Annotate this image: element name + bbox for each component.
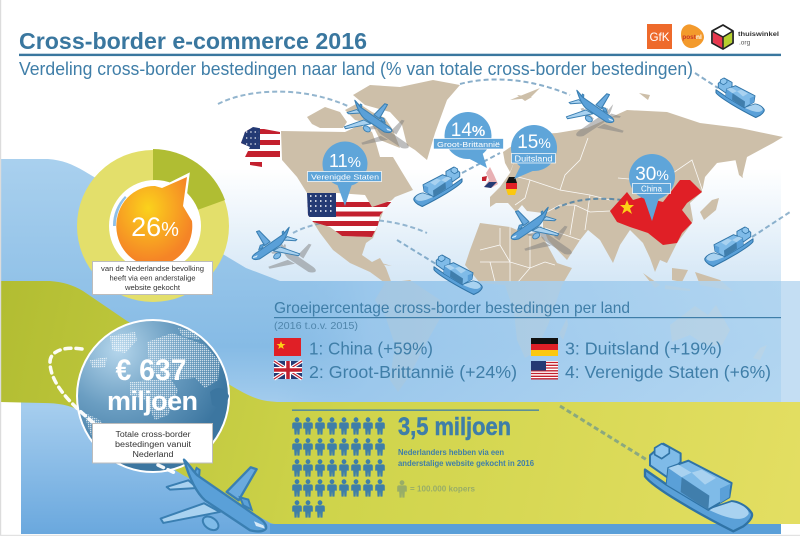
growth subheading: (2016 t.o.v. 2015) xyxy=(274,321,358,332)
callout: Groot-Brittannië 14% xyxy=(434,112,504,168)
logo: PostNL: postnl xyxy=(682,34,702,41)
Eurasia xyxy=(490,110,783,272)
text: buyers description: Nederlanders hebben via een xyxy=(398,447,504,457)
North America xyxy=(281,125,413,284)
flag: China xyxy=(274,338,301,356)
panel backdrop: growth band over the map xyxy=(277,281,781,402)
growth row 1: 1: China (+59%) xyxy=(309,338,433,358)
Germany flag shape xyxy=(506,177,517,195)
text box: population share xyxy=(92,262,212,294)
bottom blue strip xyxy=(270,524,781,534)
Australia and New Zealand xyxy=(670,305,767,360)
plane: north russia xyxy=(566,90,624,137)
growth row 4: 4: Verenigde Staten (+6%) xyxy=(565,362,771,382)
country borders xyxy=(480,138,703,282)
ship: pacific xyxy=(705,227,753,266)
large airplane xyxy=(161,460,266,533)
title: Cross-border e-commerce 2016 xyxy=(19,28,367,54)
South America xyxy=(375,280,442,392)
pie chart: 26% of population: 26% xyxy=(131,212,179,242)
callout: China 30% xyxy=(629,154,675,221)
ship: top right xyxy=(716,78,764,118)
text box: total spend: bestedingen vanuit xyxy=(115,440,192,449)
headline: 3,5 miljoen: 3,5 miljoen xyxy=(398,413,511,441)
growth heading: Groeipercentage cross-border bestedingen per land xyxy=(274,300,630,317)
callout: China 30%: China xyxy=(641,184,662,194)
callout: China 30%: 30% xyxy=(635,164,669,185)
callout: Duitsland 15%: Duitsland xyxy=(514,154,552,164)
plane: atlantic west xyxy=(252,227,316,273)
islands xyxy=(378,88,743,340)
text box: population share: website gekocht xyxy=(124,285,180,292)
globe amount xyxy=(107,354,198,416)
callout: Duitsland 15%: 15% xyxy=(517,132,551,153)
panel: growth percentages xyxy=(274,300,781,382)
globe xyxy=(77,320,229,472)
shipping and flight routes xyxy=(218,73,790,460)
text box: total spend: Nederland xyxy=(132,450,174,459)
callout: Verenigde Staten 11%: 11% xyxy=(329,151,361,171)
pie chart: 26% of population xyxy=(77,149,229,302)
growth row 2: 2: Groot-Brittannië (+24%) xyxy=(309,362,517,382)
text box: total spend xyxy=(92,424,212,463)
globe amount: € 637 xyxy=(116,354,186,387)
United Kingdom flag shape xyxy=(482,167,498,188)
callout: Groot-Brittannië 14%: 14% xyxy=(451,120,485,141)
China in red xyxy=(610,180,702,245)
logo: thuiswinkel.org: .org xyxy=(739,40,751,46)
dashed route around the globe xyxy=(50,348,175,473)
flag: Germany xyxy=(531,338,558,356)
green band xyxy=(0,281,800,524)
Africa xyxy=(465,223,572,358)
Alaska flag xyxy=(241,127,280,167)
callout: Groot-Brittannië 14%: Groot-Brittannië xyxy=(437,140,500,149)
legend: person equals 100.000 buyers xyxy=(397,480,476,498)
text box: population share: van de Nederlandse bevolking xyxy=(101,266,204,273)
world map xyxy=(281,80,783,392)
callout: Duitsland 15% xyxy=(511,125,557,179)
logo: thuiswinkel.org xyxy=(712,25,779,49)
globe amount: miljoen xyxy=(107,386,198,416)
text: buyers description: anderstalige website gekocht in 2016 xyxy=(398,458,534,468)
callout: Verenigde Staten 11%: Verenigde Staten xyxy=(311,172,379,182)
ship: atlantic north xyxy=(414,167,462,206)
plane: africa xyxy=(511,207,572,255)
plane: north america xyxy=(344,100,409,149)
logo: GfK xyxy=(647,24,672,49)
logo: GfK: GfK xyxy=(650,30,670,44)
United States flag on map xyxy=(307,193,392,237)
Canadian arctic islands xyxy=(307,103,400,148)
flag: United Kingdom xyxy=(274,361,302,379)
Greenland xyxy=(353,80,460,160)
legend: person equals 100.000 buyers: = 100.000 kopers xyxy=(410,484,476,494)
ship: atlantic south xyxy=(434,255,482,294)
text: buyers description xyxy=(398,447,534,468)
callout: Verenigde Staten 11% xyxy=(308,142,382,206)
logo: PostNL xyxy=(681,24,704,48)
growth row 3: 3: Duitsland (+19%) xyxy=(565,338,722,358)
pictogram grid: 35 buyers xyxy=(292,417,385,518)
logo: thuiswinkel.org: thuiswinkel xyxy=(738,31,779,38)
large container ship xyxy=(645,444,752,531)
subtitle: Verdeling cross-border bestedingen naar land (% van totale cross-border bestedingen) xyxy=(19,59,693,79)
text box: population share: heeft via een anderstalige xyxy=(110,276,196,282)
text box: total spend: Totale cross-border xyxy=(116,430,191,439)
flag: United States xyxy=(531,361,558,379)
